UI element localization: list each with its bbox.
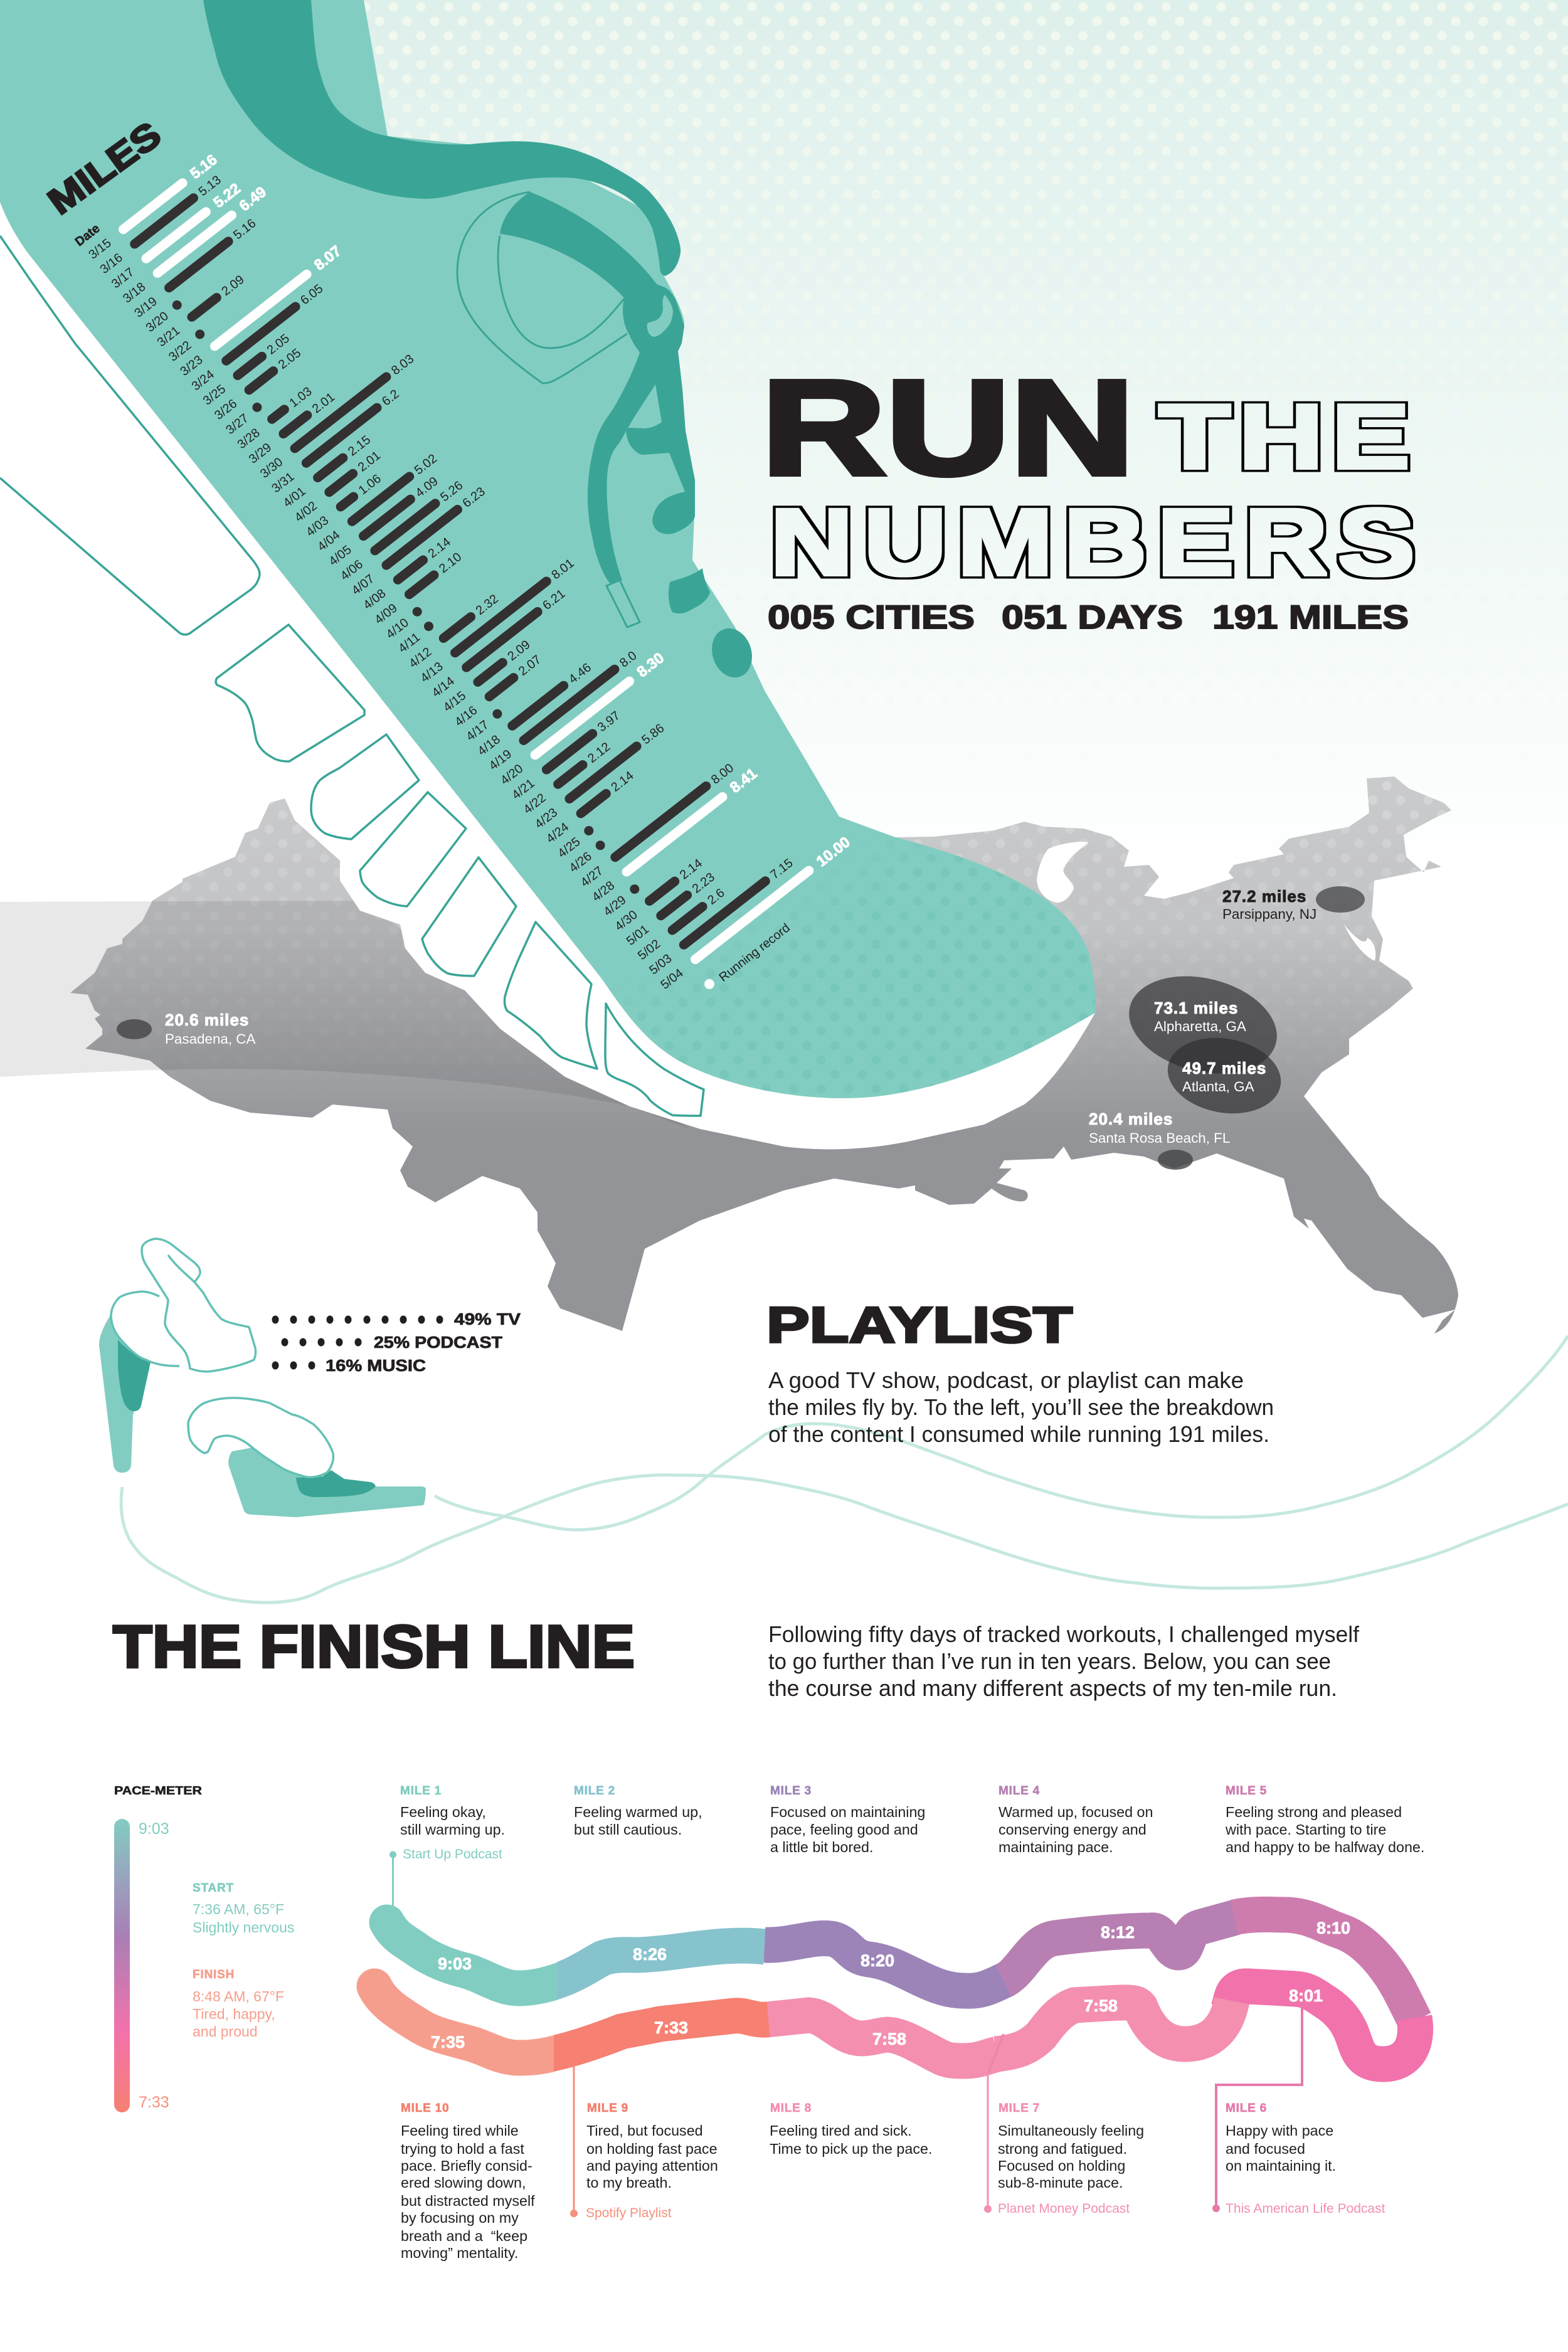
mile 1 note: MILE 1 [400, 1784, 442, 1798]
mile 1 note: Feeling okay, [400, 1804, 486, 1820]
bar chart: daily miles: 2.14 [426, 535, 453, 561]
bar chart: daily miles: 8.07 [311, 243, 344, 274]
bar chart: daily miles: 3/16 [98, 251, 125, 277]
mile 8 note: Feeling tired and sick. [770, 2122, 912, 2139]
bar chart: daily miles: 3/21 [155, 324, 183, 349]
bar chart: daily miles: 6.21 [540, 587, 568, 613]
shoe sole panels [0, 236, 704, 1116]
bar chart: daily miles: 4/20 [498, 762, 526, 788]
bar chart: daily miles: 2.14 [677, 856, 705, 882]
mile 4 note: conserving energy and [999, 1821, 1147, 1838]
pace labels on the course: 8:10 [1316, 1919, 1350, 1937]
bar chart: daily miles: 2.01 [356, 448, 383, 475]
heading: playlist: PLAYLIST [766, 1297, 1073, 1353]
mile 10 note: by focusing on my [401, 2210, 519, 2226]
mile 10 note: breath and a “keep [401, 2228, 527, 2244]
bar chart: daily miles: 5.13 [196, 173, 224, 199]
bar chart: daily miles: 4/22 [521, 791, 549, 817]
mile 6 note: MILE 6 [1226, 2102, 1267, 2115]
map markers: Alpharetta and Atlanta: 49.7 miles [1182, 1059, 1266, 1078]
bar chart: daily miles: 2.10 [437, 550, 464, 576]
bar chart: daily miles: 2.6 [705, 886, 728, 908]
map markers: Alpharetta and Atlanta [1119, 961, 1287, 1122]
miles heading: MILES [41, 114, 169, 223]
mile 1 note: still warming up. [400, 1821, 505, 1838]
map marker: Santa Rosa Beach: Santa Rosa Beach, FL [1089, 1130, 1230, 1146]
mile 8 note: Time to pick up the pace. [770, 2141, 932, 2157]
mile 6 note: on maintaining it. [1226, 2158, 1336, 2174]
mile 4 note: Warmed up, focused on [999, 1804, 1153, 1820]
bar chart: daily miles: 3/17 [109, 265, 137, 291]
mile 9 note: MILE 9 [587, 2102, 628, 2115]
bar chart: daily miles: 2.23 [690, 870, 718, 896]
mile 5 note: and happy to be halfway done. [1226, 1839, 1424, 1855]
pace meter legend: START [193, 1882, 234, 1895]
bar chart: daily miles: 5/04 [658, 966, 686, 992]
bar chart: daily miles: 3/15 [86, 236, 114, 262]
headline stats: 005 CITIES [768, 599, 975, 636]
bar chart: daily miles: 7.15 [768, 856, 796, 882]
shoe collar [203, 0, 681, 276]
bar chart: daily miles: 4/12 [406, 645, 434, 671]
bar chart: daily miles: 4/10 [384, 616, 411, 642]
bar chart: daily miles: 3/19 [132, 295, 160, 320]
bar chart: daily miles: 4/24 [544, 820, 571, 846]
mile 8 note: MILE 8 [770, 2102, 812, 2115]
bar chart: daily miles: 3/25 [201, 382, 228, 408]
mile 7 note: Simultaneously feeling [998, 2122, 1144, 2139]
bar chart: daily miles: 8.30 [634, 649, 667, 681]
bar chart: daily miles: 4/28 [590, 879, 617, 904]
title: run the numbers [761, 352, 1426, 595]
bar chart: daily miles: 2.09 [505, 638, 533, 664]
mile 2 note: MILE 2 [574, 1784, 615, 1798]
pace meter legend [114, 1784, 294, 2112]
mile 10 note [401, 2102, 535, 2261]
bar chart: daily miles: 4/07 [349, 572, 377, 598]
map marker: Santa Rosa Beach: 20.4 miles [1089, 1110, 1173, 1128]
bar chart: daily miles: 4/08 [361, 586, 388, 612]
bar chart: daily miles: 4/27 [578, 864, 606, 890]
headline stats: 191 MILES [1212, 599, 1409, 636]
title: run the numbers: THE [1159, 386, 1418, 487]
bar chart: daily miles: 5.02 [412, 452, 440, 477]
bar chart: daily miles: 2.12 [585, 740, 613, 766]
legend: running record: Running record [717, 921, 793, 985]
bar chart: daily miles: 8.0 [617, 649, 639, 670]
playlist description [768, 1367, 1274, 1447]
mile 4 note: MILE 4 [999, 1784, 1040, 1798]
mile 10 note: trying to hold a fast [401, 2141, 524, 2157]
bar chart: daily miles: 2.15 [346, 433, 373, 459]
translucent band across the west of the map [0, 901, 690, 1129]
mile 4 note [999, 1784, 1153, 1855]
mile 5 note: Feeling strong and pleased [1226, 1804, 1402, 1820]
mile 2 note: Feeling warmed up, [574, 1804, 702, 1820]
pace labels on the course: 7:58 [1084, 1996, 1118, 2015]
mile 1 note: Start Up Podcast [403, 1847, 502, 1862]
mile 1 note [389, 1784, 505, 1908]
bar chart: daily miles: 4/05 [326, 543, 354, 569]
mile 9 note: Tired, but focused [586, 2122, 703, 2139]
icon: earbud lower [188, 1398, 426, 1517]
playlist description: the miles fly by. To the left, you’ll see the breakdown [768, 1394, 1274, 1420]
title: run the numbers: NUMBERS [770, 490, 1426, 595]
bar chart: daily miles: 4/14 [430, 674, 457, 700]
course ribbon: ten mile run [374, 1914, 1416, 2074]
bar chart: daily miles: 10.00 [813, 834, 854, 870]
bar chart: daily miles: 4/09 [372, 601, 400, 627]
mile 6 note: This American Life Podcast [1226, 2201, 1385, 2216]
mile 3 note: pace, feeling good and [770, 1821, 918, 1838]
finish line description: Following fifty days of tracked workouts, I challenged myself [768, 1621, 1360, 1647]
pace labels on the course: 7:35 [431, 2033, 465, 2052]
mile 7 note [984, 2073, 1144, 2216]
bar chart: daily miles: 4/03 [304, 514, 331, 539]
bar chart: daily miles: 4/25 [555, 835, 583, 861]
pace labels on the course: 8:12 [1101, 1923, 1135, 1942]
pace labels on the course [431, 1919, 1350, 2052]
mile 10 note: moving” mentality. [401, 2245, 518, 2261]
mile 5 note: MILE 5 [1226, 1784, 1267, 1798]
bar chart: daily miles: 4/17 [464, 718, 492, 744]
bar chart: daily miles: 2.32 [474, 592, 501, 618]
map marker: Parsippany: 27.2 miles [1222, 887, 1306, 906]
mile 5 note: with pace. Starting to tire [1225, 1821, 1386, 1838]
bar chart: daily miles: 4/30 [612, 908, 640, 934]
bar chart: daily miles: 1.03 [287, 384, 315, 410]
bar chart: daily miles: 3/27 [223, 411, 252, 437]
icon: earbud upper [99, 1239, 256, 1473]
bar chart: daily miles: 4/01 [281, 484, 309, 511]
bar chart: daily miles: 8.00 [709, 761, 736, 787]
bar chart: daily miles: 3/29 [246, 440, 274, 467]
bar chart: daily miles: 6.23 [460, 485, 488, 511]
mile 7 note: Planet Money Podcast [998, 2201, 1130, 2216]
bar chart: daily miles: 4/26 [567, 849, 595, 876]
bar chart: daily miles: 5/03 [647, 951, 674, 977]
finish line description: to go further than I’ve run in ten years. Below, you can see [768, 1648, 1331, 1674]
bar chart: daily miles: 8.41 [727, 765, 760, 797]
bar chart: daily miles [85, 151, 854, 993]
bar chart: daily miles: 3/18 [120, 280, 148, 306]
bar chart: daily miles: 3.97 [595, 709, 623, 734]
bar chart: daily miles: 2.07 [516, 653, 544, 679]
bar chart: daily miles: 3/26 [212, 397, 240, 423]
shoelace [500, 192, 758, 683]
pace labels on the course: 9:03 [438, 1954, 472, 1973]
map marker: Santa Rosa Beach [1089, 1110, 1230, 1170]
bar chart: daily miles: 4.46 [566, 660, 594, 687]
pace meter legend: Tired, happy, [193, 2006, 275, 2022]
mile 3 note: Focused on maintaining [770, 1804, 925, 1820]
map marker: Pasadena: Pasadena, CA [165, 1031, 255, 1047]
shoe eyelet outlines [457, 192, 627, 383]
bar chart: daily miles: 4/19 [487, 747, 514, 773]
bar chart: daily miles: 4/29 [601, 893, 628, 919]
playlist breakdown: 16% MUSIC [326, 1356, 426, 1375]
mile 3 note: a little bit bored. [770, 1839, 873, 1855]
map marker: Parsippany [1222, 886, 1365, 922]
mile 8 note [770, 2102, 932, 2157]
bar chart: daily miles: 3/23 [177, 353, 206, 379]
bar chart: daily miles: 5/01 [624, 923, 652, 948]
bar chart: daily miles: 5.16 [231, 216, 258, 242]
background: mint gradient with dot pattern [364, 0, 1568, 731]
bar chart: daily miles: 4/06 [338, 558, 366, 583]
bar chart: daily miles: 3/24 [189, 368, 217, 393]
mile 10 note: but distracted myself [401, 2193, 535, 2209]
mile 7 note: strong and fatigued. [998, 2141, 1127, 2157]
bar chart: daily miles: 4.09 [413, 474, 441, 501]
map markers: Alpharetta and Atlanta: Atlanta, GA [1182, 1079, 1254, 1094]
map marker: Pasadena [117, 1010, 255, 1047]
mile 6 note: and focused [1226, 2141, 1305, 2157]
playlist breakdown [272, 1310, 521, 1375]
pace meter legend: 9:03 [139, 1820, 169, 1838]
mile 9 note: Spotify Playlist [586, 2206, 672, 2220]
mile 6 note: Happy with pace [1226, 2122, 1333, 2139]
bar chart: daily miles: 3/28 [235, 426, 263, 452]
playlist description: A good TV show, podcast, or playlist can make [768, 1367, 1244, 1393]
mile 7 note: Focused on holding [998, 2158, 1125, 2174]
headline stats [768, 599, 1409, 636]
pace labels on the course: 7:33 [654, 2018, 688, 2037]
pace meter legend: Slightly nervous [193, 1919, 294, 1936]
bar chart: daily miles: 6.49 [236, 183, 270, 215]
bar chart: daily miles: 2.01 [310, 390, 337, 416]
bar chart: daily miles: 2.14 [608, 769, 637, 795]
shoe upper [0, 0, 1129, 1129]
finish line description [768, 1621, 1360, 1701]
pace meter legend: 7:33 [139, 2094, 169, 2111]
bar chart: daily miles: 3/31 [269, 470, 297, 495]
map marker: Pasadena: 20.6 miles [165, 1010, 249, 1029]
bar chart: daily miles: 4/13 [418, 660, 446, 686]
date column heading: Date [73, 221, 102, 249]
bar chart: daily miles: 5.86 [639, 721, 667, 747]
playlist description: of the content I consumed while running 191 miles. [768, 1421, 1269, 1447]
mile 3 note: MILE 3 [770, 1784, 812, 1798]
mile 9 note [570, 2067, 718, 2220]
bar chart: daily miles: 5/02 [635, 937, 663, 963]
mile 4 note: maintaining pace. [999, 1839, 1113, 1855]
mile 2 note [574, 1784, 702, 1838]
bar chart: daily miles: 4/23 [532, 805, 560, 832]
map markers: Alpharetta and Atlanta: 73.1 miles [1154, 999, 1238, 1017]
pace labels on the course: 8:26 [633, 1945, 667, 1964]
mile 10 note: Feeling tired while [401, 2122, 519, 2139]
bar chart: daily miles: 4/15 [441, 689, 469, 714]
bar chart: daily miles: 5.22 [210, 180, 244, 211]
pace meter legend: 7:36 AM, 65°F [193, 1901, 284, 1917]
bar chart: daily miles: 5.16 [187, 151, 220, 183]
mile 2 note: but still cautious. [574, 1821, 682, 1838]
mile 6 note [1212, 2003, 1385, 2216]
map markers: Alpharetta and Atlanta: Alpharetta, GA [1154, 1019, 1246, 1034]
bar chart: daily miles: 4/21 [509, 776, 538, 802]
bar chart: daily miles: 2.09 [219, 273, 247, 299]
map: United States silhouette [70, 776, 1458, 1333]
mile 9 note: and paying attention [586, 2158, 718, 2174]
finish line description: the course and many different aspects of my ten-mile run. [768, 1675, 1337, 1701]
bar chart: daily miles: 5.26 [438, 479, 465, 504]
heading: the finish line: THE FINISH LINE [113, 1613, 635, 1680]
pace labels on the course: 8:01 [1289, 1986, 1323, 2005]
mile 7 note: MILE 7 [999, 2102, 1040, 2115]
bar chart: daily miles: 4/02 [292, 499, 320, 525]
bar chart: daily miles: 3/20 [144, 309, 171, 335]
pace meter legend: 8:48 AM, 67°F [193, 1988, 284, 2005]
bar chart: daily miles: 4/16 [452, 703, 480, 729]
bar chart: daily miles: 4/11 [396, 630, 423, 655]
mile 9 note: on holding fast pace [586, 2141, 718, 2157]
bar chart: daily miles: 6.2 [379, 387, 402, 409]
pace labels on the course: 8:20 [861, 1951, 894, 1970]
bar chart: daily miles: 3/30 [258, 455, 285, 481]
headline stats: 051 DAYS [1002, 599, 1183, 636]
bar chart: daily miles: 8.01 [549, 556, 577, 582]
pace meter legend: and proud [193, 2023, 258, 2040]
white sole area under the shoe [0, 188, 1095, 1149]
playlist breakdown: 25% PODCAST [374, 1333, 502, 1352]
mile 7 note: sub-8-minute pace. [998, 2175, 1123, 2191]
bar chart: daily miles: 4/04 [315, 528, 342, 554]
title: run the numbers: RUN [761, 352, 1135, 503]
mile 10 note: ered slowing down, [401, 2175, 526, 2191]
bar chart: daily miles: 2.05 [265, 331, 292, 358]
mile 10 note: MILE 10 [401, 2102, 449, 2115]
bar chart: daily miles: 6.05 [298, 282, 326, 307]
bar chart: daily miles: 8.03 [389, 352, 416, 378]
playlist breakdown: 49% TV [454, 1310, 521, 1328]
bar chart: daily miles: 1.06 [356, 472, 384, 497]
pace labels on the course: 7:58 [872, 2030, 906, 2048]
pace meter legend: FINISH [193, 1968, 235, 1981]
earphone cable [121, 1336, 1568, 1602]
pace meter legend: PACE-METER [114, 1784, 202, 1797]
mile 5 note [1225, 1784, 1424, 1855]
map marker: Parsippany: Parsippany, NJ [1222, 906, 1316, 922]
bar chart: daily miles: 4/18 [475, 733, 503, 758]
mile 3 note [770, 1784, 925, 1855]
bar chart: daily miles: 2.05 [276, 346, 304, 372]
mile 9 note: to my breath. [586, 2175, 672, 2191]
mile 10 note: pace. Briefly consid- [401, 2158, 532, 2174]
bar chart: daily miles: 3/22 [166, 338, 194, 364]
